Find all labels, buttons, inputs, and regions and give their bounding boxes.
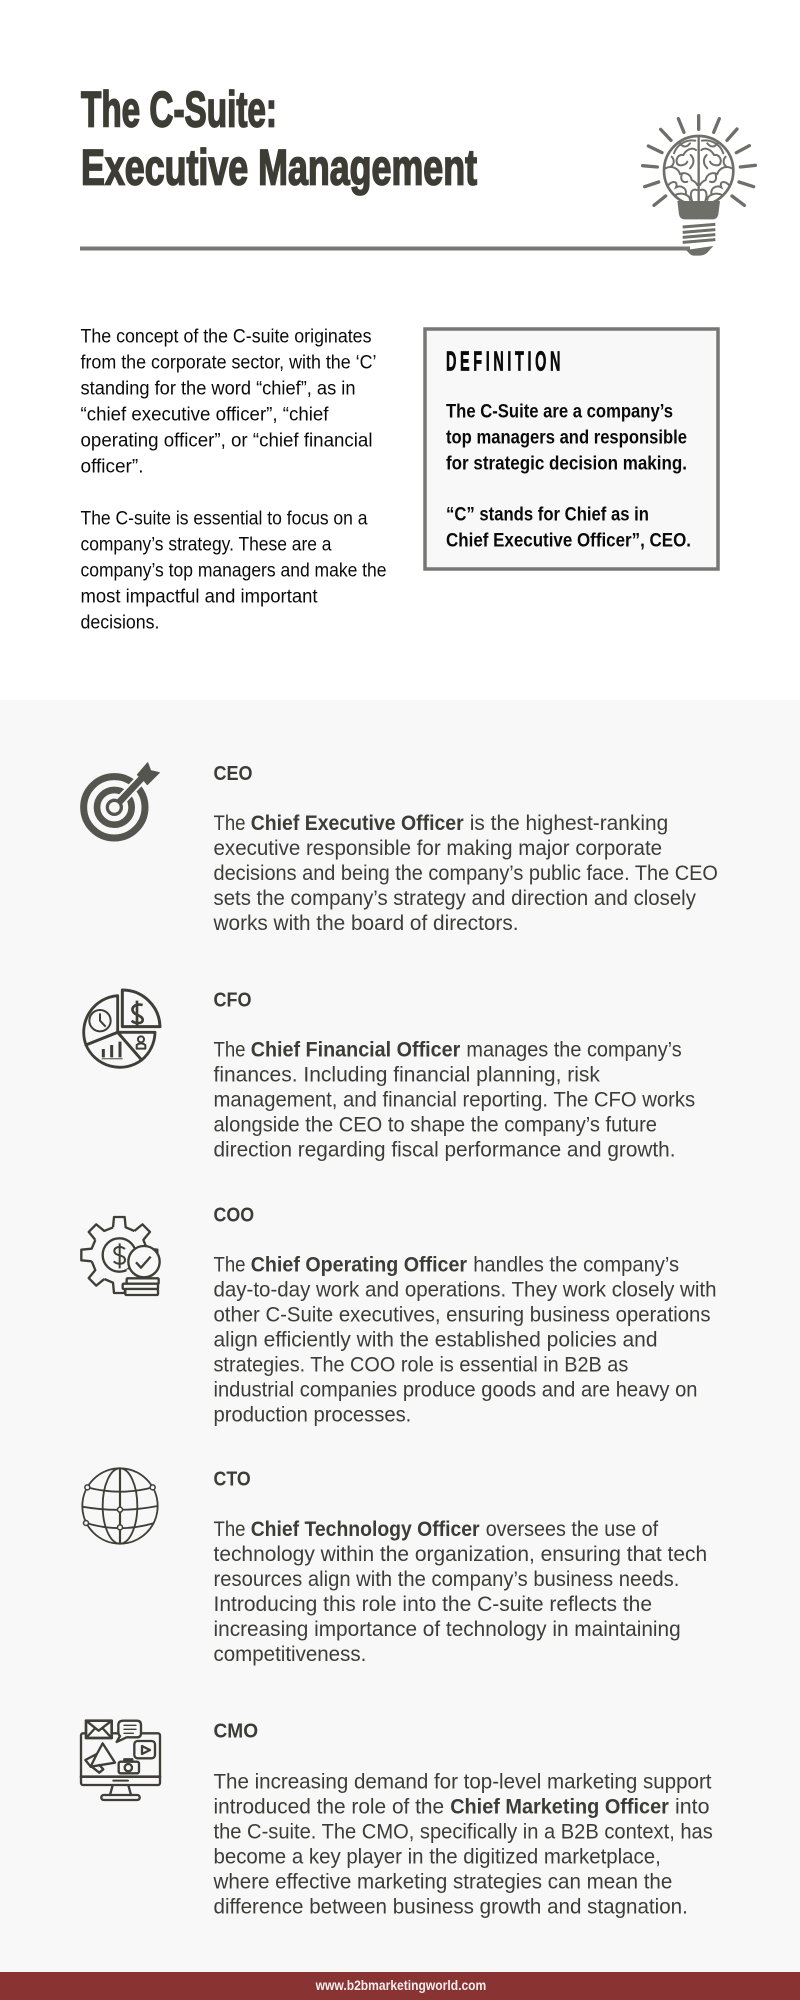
CMO role: CMO — [214, 1721, 258, 1743]
definition heading: DEFINITION — [446, 346, 564, 377]
icon: gear with coins — [81, 1217, 160, 1298]
CMO role: The increasing demand for top-level marketing support — [214, 1770, 712, 1793]
CEO role: works with the board of directors. — [213, 912, 518, 935]
title: The C-Suite: — [81, 82, 277, 138]
COO role: other C-Suite executives, ensuring business operations — [214, 1304, 710, 1327]
CMO role: the C-suite. The CMO, specifically in a B2B context, has — [214, 1820, 713, 1843]
intro text block — [80, 327, 386, 634]
CEO role: sets the company’s strategy and direction and closely — [214, 887, 696, 910]
CMO role: introduced the role of the — [214, 1795, 444, 1818]
CMO role: where effective marketing strategies can mean the — [213, 1870, 672, 1893]
icon: light bulb with brain — [643, 116, 755, 256]
intro text block: The concept of the C-suite originates — [80, 327, 372, 348]
CMO role: Chief Marketing Officer — [450, 1795, 669, 1818]
COO role: industrial companies produce goods and are heavy on — [214, 1379, 698, 1402]
icon: target with arrow — [84, 763, 159, 838]
COO role: day-to-day work and operations. They work closely with — [214, 1279, 716, 1302]
CEO role: CEO — [214, 763, 252, 785]
CEO role — [213, 763, 718, 935]
CFO role: finances. Including financial planning, risk — [214, 1064, 600, 1087]
intro text block: company’s strategy. These are a — [80, 535, 332, 556]
intro text block: most impactful and important — [80, 587, 318, 608]
COO role — [214, 1205, 716, 1427]
title: Executive Management — [81, 140, 477, 196]
CMO role: into — [675, 1795, 710, 1818]
CMO role: become a key player in the digitized marketplace, — [214, 1845, 661, 1868]
CFO role: The — [214, 1039, 246, 1062]
CTO role: increasing importance of technology in maintaining — [214, 1618, 681, 1641]
panel: roles background — [0, 700, 800, 1972]
CTO role: resources align with the company’s business needs. — [214, 1568, 679, 1591]
COO role: align efficiently with the established policies and — [214, 1329, 658, 1352]
CEO role: decisions and being the company’s public face. The CEO — [214, 862, 718, 885]
intro text block: standing for the word “chief”, as in — [80, 379, 356, 400]
intro text block: “chief executive officer”, “chief — [80, 405, 329, 426]
intro text block: from the corporate sector, with the ‘C’ — [80, 353, 376, 374]
CFO role — [214, 990, 695, 1162]
CTO role — [214, 1469, 707, 1666]
definition text: The C-Suite are a company’s — [446, 401, 673, 422]
COO role: strategies. The COO role is essential in B2B as — [214, 1354, 628, 1377]
CTO role: Introducing this role into the C-suite reflects the — [214, 1593, 652, 1616]
COO role: Chief Operating Officer — [251, 1254, 467, 1277]
panel: definition — [425, 329, 718, 569]
COO role: The — [214, 1254, 246, 1277]
definition text: “C” stands for Chief as in — [446, 505, 649, 526]
COO role: production processes. — [214, 1404, 411, 1427]
definition text: for strategic decision making. — [446, 453, 687, 474]
intro text block: decisions. — [80, 613, 160, 634]
CMO role: difference between business growth and stagnation. — [214, 1895, 688, 1918]
definition text: Chief Executive Officer”, CEO. — [446, 531, 691, 552]
title — [81, 82, 477, 196]
CTO role: CTO — [214, 1469, 251, 1491]
COO role: handles the company’s — [473, 1254, 679, 1277]
CEO role: The — [214, 812, 246, 835]
header divider line — [80, 246, 690, 250]
definition text — [446, 401, 691, 552]
intro text block: company’s top managers and make the — [80, 561, 386, 582]
CTO role: technology within the organization, ensuring that tech — [214, 1543, 707, 1566]
CTO role: Chief Technology Officer — [251, 1518, 480, 1541]
CFO role: CFO — [214, 990, 252, 1012]
CEO role: executive responsible for making major corporate — [214, 837, 662, 860]
CFO role: Chief Financial Officer — [251, 1039, 460, 1062]
CMO role — [213, 1721, 713, 1918]
icon: pie chart — [84, 990, 160, 1067]
COO role: COO — [214, 1205, 254, 1227]
CFO role: direction regarding fiscal performance and growth. — [214, 1139, 676, 1162]
CFO role: management, and financial reporting. The CFO works — [214, 1089, 695, 1112]
CFO role: alongside the CEO to shape the company’s future — [214, 1114, 657, 1137]
CTO role: The — [214, 1518, 246, 1541]
footer bar: www.b2bmarketingworld.com — [315, 1978, 486, 1993]
CTO role: competitiveness. — [214, 1643, 366, 1666]
footer bar — [0, 1972, 800, 2000]
intro text block: officer”. — [80, 457, 144, 478]
CFO role: manages the company’s — [466, 1039, 682, 1062]
definition text: top managers and responsible — [446, 427, 687, 448]
CTO role: oversees the use of — [486, 1518, 658, 1541]
intro text block: The C-suite is essential to focus on a — [80, 509, 368, 530]
icon: marketing monitor — [81, 1721, 160, 1800]
icon: globe network — [82, 1468, 158, 1544]
intro text block: operating officer”, or “chief financial — [80, 431, 372, 452]
CEO role: is the highest-ranking — [470, 812, 668, 835]
CEO role: Chief Executive Officer — [251, 812, 464, 835]
